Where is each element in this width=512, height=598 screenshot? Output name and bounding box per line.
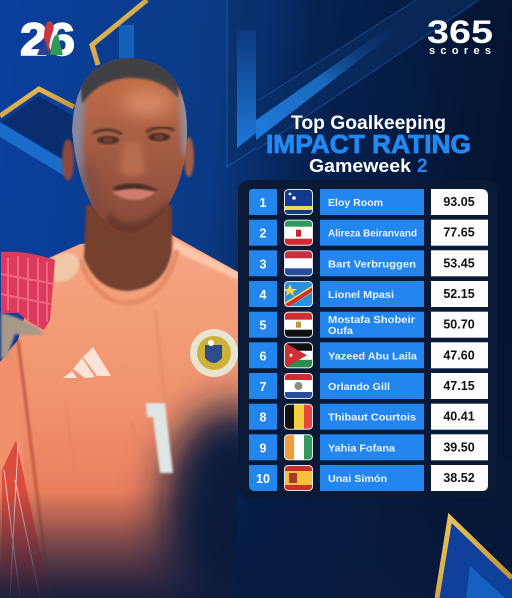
collar [80,250,177,303]
row 6: 47.60 [443,348,475,362]
gold chevron bottom right [437,518,512,598]
player [0,58,238,598]
row 1: 93.05 [443,195,475,209]
row 5: Mostafa Shobeir [328,314,415,326]
title: IMPACT RATING [266,131,471,159]
row 8 [249,404,488,430]
row 5: 50.70 [443,318,475,332]
row 4: 52.15 [443,287,475,301]
row 9: 39.50 [443,440,475,454]
row 5 [249,312,488,338]
row 2: Alireza Beiranvand [328,228,417,240]
row 1: 1 [260,196,267,210]
title: 2 [417,156,428,177]
row 10: Unai Simón [328,473,387,485]
row 5: Oufa [328,325,353,337]
row 10 [249,465,488,491]
row 4: 4 [260,288,267,302]
row 4 [249,281,488,307]
row 3: 53.45 [443,256,475,270]
365scores logo [427,14,493,57]
row 7: 47.15 [443,379,475,393]
row 3 [249,250,488,276]
row 7 [249,373,488,399]
title: Gameweek [309,156,412,176]
row 8: 8 [260,411,267,425]
row 7: 7 [260,380,267,394]
stripes logo [63,347,111,378]
table panel [238,180,497,498]
row 8: Thibaut Courtois [328,412,416,424]
row 10: 38.52 [443,471,475,485]
decorative blue chevrons [0,0,480,178]
row 1 [249,189,488,215]
title [266,113,471,177]
row 2 [249,220,488,246]
row 6 [249,342,488,368]
row 3: Bart Verbruggen [328,258,416,270]
row 10: 10 [256,472,270,486]
shirt [0,234,238,598]
title: Top Goalkeeping [291,113,446,134]
tournament logo 26: 26 [20,14,75,65]
neck [84,205,172,291]
row 2: 2 [260,227,267,241]
row 5: 5 [260,319,267,333]
row 4: Lionel Mpasi [328,289,394,301]
gold chevron top [0,0,147,116]
365scores logo: 365 [427,14,493,50]
shirt number 1 [146,403,173,473]
row 9: 9 [260,441,267,455]
ranking table [238,180,497,498]
row 8: 40.41 [443,410,475,424]
row 6: Yazeed Abu Laila [328,350,417,362]
glove [1,252,80,360]
badge [190,329,238,377]
row 3: 3 [260,257,267,271]
row 1: Eloy Room [328,197,383,209]
row 9 [249,434,488,460]
row 7: Orlando Gill [328,381,390,393]
row 2: 77.65 [443,226,475,240]
365scores logo: scores [429,45,491,57]
row 6: 6 [260,349,267,363]
head [60,58,195,232]
row 9: Yahia Fofana [328,442,395,454]
